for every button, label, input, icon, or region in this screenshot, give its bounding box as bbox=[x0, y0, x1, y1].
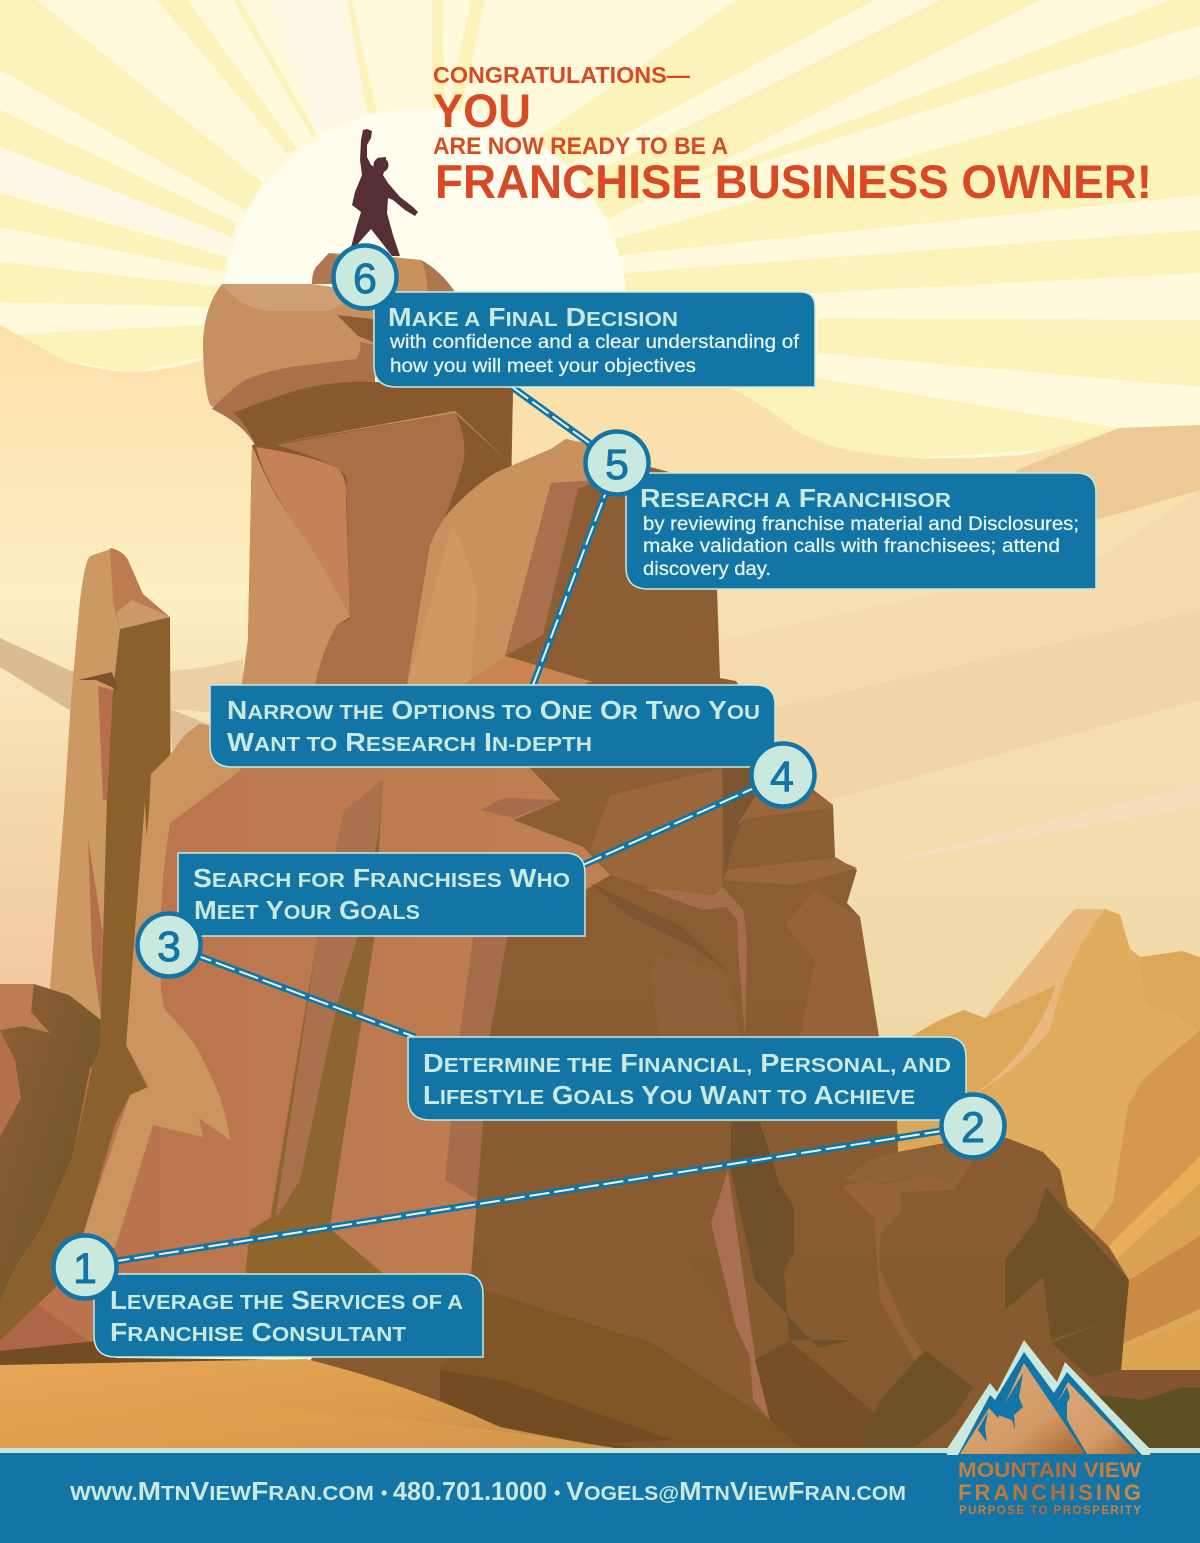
step badge 6: 6 bbox=[353, 255, 377, 303]
title bbox=[433, 62, 1152, 208]
logo wordmark: MOUNTAIN VIEW bbox=[958, 1459, 1141, 1482]
left spire bbox=[49, 548, 171, 1049]
step 3 box bbox=[178, 853, 585, 936]
footer bar: 480.701.1000 bbox=[393, 1476, 547, 1506]
logo wordmark bbox=[958, 1459, 1141, 1517]
step 6 box bbox=[374, 292, 815, 387]
connector line box 4 to 5 bbox=[533, 463, 617, 685]
title: YOU bbox=[433, 84, 531, 137]
footer bar: • bbox=[554, 1483, 560, 1503]
hoodoo cap bbox=[203, 253, 513, 464]
step badge 4 bbox=[752, 744, 814, 806]
step badge 3 bbox=[138, 914, 200, 976]
title: CONGRATULATIONS— bbox=[433, 62, 690, 88]
brown right mass bbox=[310, 760, 1200, 1460]
main hoodoo column bbox=[241, 388, 513, 700]
logo wordmark: PURPOSE TO PROSPERITY bbox=[959, 1505, 1141, 1517]
connector line box 3 to 4 bbox=[583, 775, 783, 865]
rock formation bbox=[0, 253, 1200, 1460]
step 4 box: WANT TO RESEARCH IN-DEPTH bbox=[227, 727, 592, 757]
step badge 6 bbox=[334, 246, 396, 308]
step 5 box: by reviewing franchise material and Disclosures; bbox=[643, 514, 1079, 535]
step 5 box: discovery day. bbox=[643, 559, 771, 580]
step 5 box: RESEARCH A FRANCHISOR bbox=[640, 483, 951, 513]
title: ARE NOW READY TO BE A bbox=[433, 133, 728, 160]
lit left block bbox=[82, 724, 241, 1248]
footer bar: VOGELS@MTNVIEWFRAN.COM bbox=[566, 1476, 906, 1506]
logo wordmark: FRANCHISING bbox=[958, 1480, 1141, 1505]
step 1 box: FRANCHISE CONSULTANT bbox=[110, 1317, 407, 1347]
left foreground rock bbox=[0, 984, 101, 1355]
connector line 1 to 2 bbox=[85, 1126, 973, 1266]
step 4 box bbox=[210, 685, 775, 767]
step 2 box: LIFESTYLE GOALS YOU WANT TO ACHIEVE bbox=[423, 1080, 915, 1110]
step badge 4: 4 bbox=[770, 753, 794, 801]
logo mountains bbox=[947, 1340, 1150, 1455]
step 4 box: NARROW THE OPTIONS TO ONE OR TWO YOU bbox=[227, 695, 760, 725]
step 6 box: MAKE A FINAL DECISION bbox=[388, 302, 678, 332]
step badge 5: 5 bbox=[605, 441, 629, 489]
person silhouette bbox=[351, 129, 418, 256]
sun bbox=[223, 108, 627, 512]
step badge 3: 3 bbox=[157, 923, 181, 971]
step 3 box: MEET YOUR GOALS bbox=[194, 895, 420, 925]
step 6 box: how you will meet your objectives bbox=[390, 356, 696, 377]
step badge 1: 1 bbox=[73, 1245, 97, 1293]
step badge 2 bbox=[942, 1094, 1004, 1158]
step badge 5 bbox=[586, 432, 648, 494]
step 2 box bbox=[408, 1037, 966, 1120]
step 6 box: with confidence and a clear understanding of bbox=[389, 332, 800, 353]
connector line box 6 to 5 bbox=[512, 387, 617, 463]
background mountain right bbox=[860, 909, 1200, 1460]
distant mountain right bbox=[720, 425, 1200, 867]
ledge dark bbox=[0, 1341, 650, 1450]
step 1 box: LEVERAGE THE SERVICES OF A bbox=[110, 1285, 463, 1315]
step 5 box: make validation calls with franchisees; attend bbox=[643, 536, 1060, 557]
sand foreground bbox=[0, 1359, 640, 1452]
sun rays bbox=[0, 0, 1200, 470]
step 3 box: SEARCH FOR FRANCHISES WHO bbox=[193, 863, 570, 893]
far sky left bbox=[0, 325, 300, 1000]
right peak bbox=[400, 439, 800, 800]
far sky right bbox=[500, 388, 1200, 1040]
step badge 2: 2 bbox=[961, 1104, 985, 1152]
dark trunk bbox=[0, 800, 147, 1340]
vertical strata bbox=[245, 780, 507, 1275]
step badge 1 bbox=[54, 1236, 116, 1298]
connector line 3 to box 2 bbox=[169, 945, 415, 1037]
title: FRANCHISE BUSINESS OWNER! bbox=[435, 155, 1152, 208]
logo bbox=[947, 1340, 1150, 1517]
distant hills left bbox=[0, 638, 243, 750]
footer bar bbox=[0, 1448, 1200, 1543]
footer bar: WWW.MTNVIEWFRAN.COM bbox=[70, 1476, 374, 1506]
step 2 box: DETERMINE THE FINANCIAL, PERSONAL, AND bbox=[423, 1048, 951, 1078]
pale rays bbox=[0, 0, 367, 252]
step 1 box bbox=[94, 1274, 483, 1357]
step 5 box bbox=[626, 473, 1096, 589]
brown rock details bbox=[440, 768, 1200, 1450]
footer bar: • bbox=[381, 1483, 387, 1503]
lower orange mass bbox=[17, 720, 610, 1350]
